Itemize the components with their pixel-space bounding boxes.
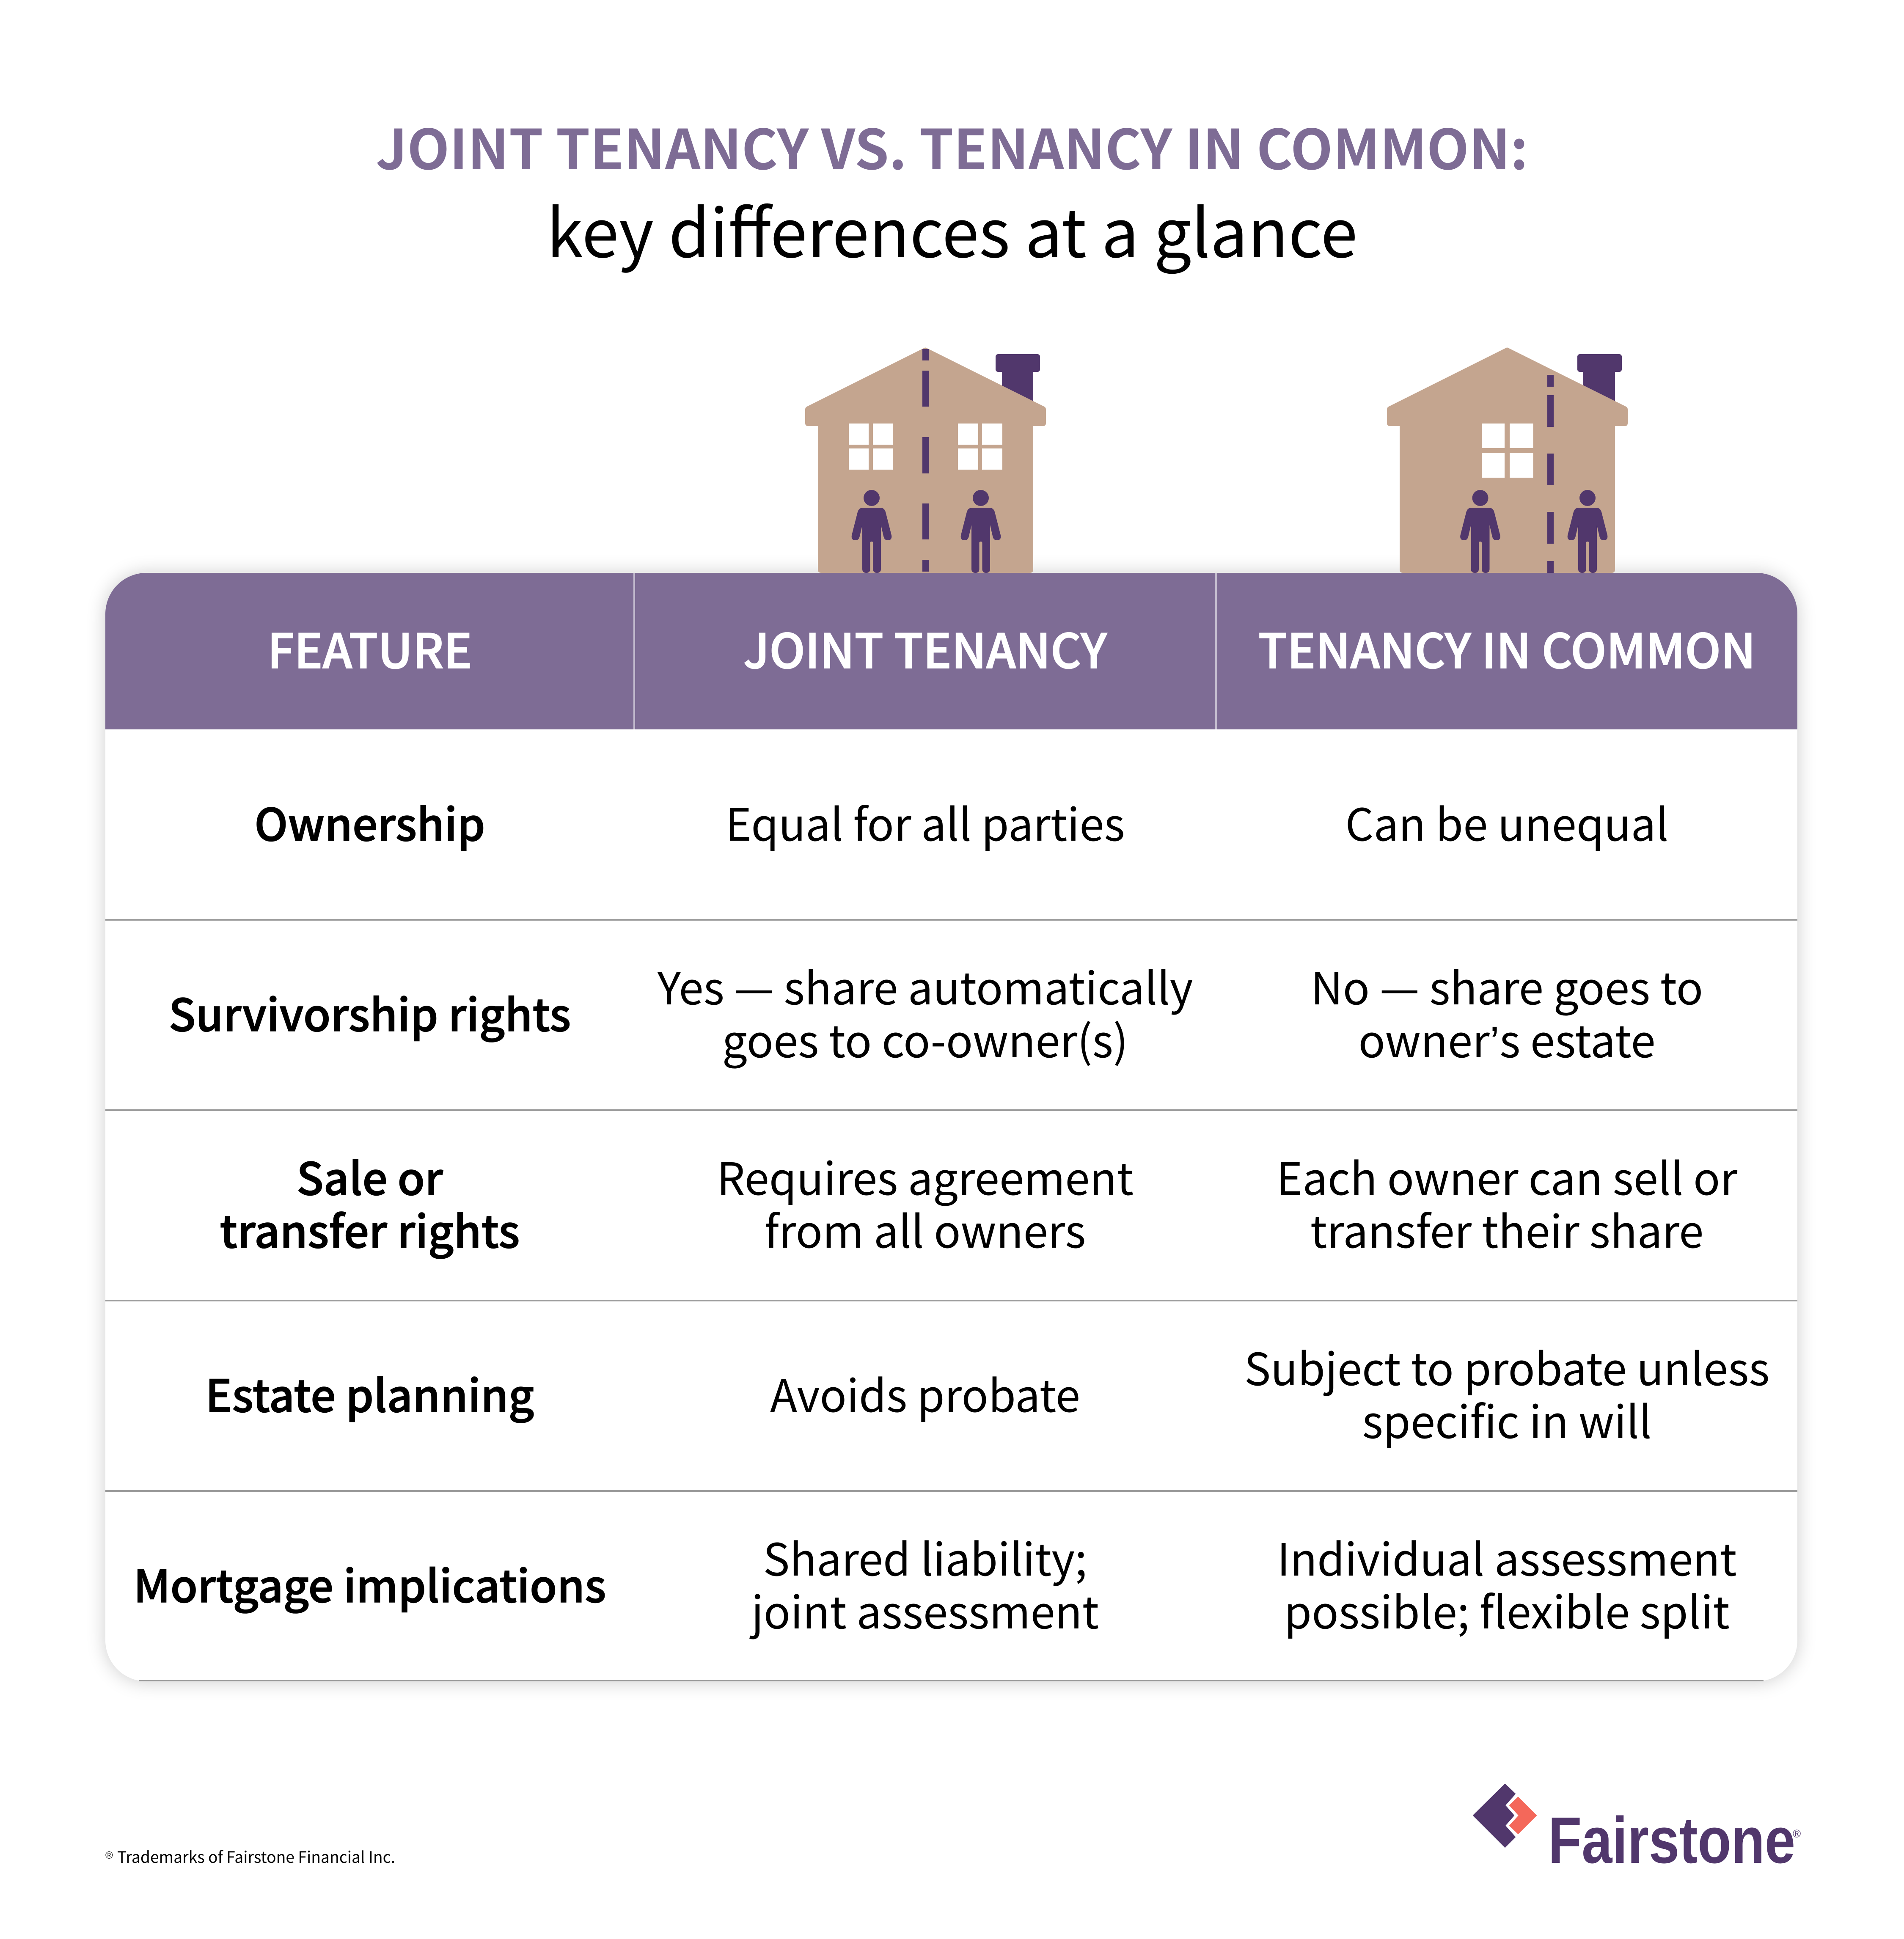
tenancy in common value: specific in will [1362,1387,1652,1451]
logo mark purple [1473,1784,1515,1847]
joint tenancy value [634,1488,1216,1678]
wordmark: Fairstone [1548,1804,1795,1877]
feature label: transfer rights [220,1196,520,1261]
tenancy in common value: Subject to probate unless [1244,1334,1769,1398]
tenancy in common value: Can be unequal [1345,789,1668,854]
subtitle: key differences at a glance [547,181,1357,277]
joint tenancy value: Shared liability; [763,1524,1087,1589]
tenancy in common value [1216,1298,1798,1488]
person right [961,490,1001,573]
tenancy in common value: No — share goes to [1311,953,1703,1018]
logo mark coral [1510,1797,1536,1834]
chimney [996,354,1040,406]
panel: comparison table [105,573,1797,1681]
tenancy in common value [1216,917,1798,1107]
dashed equal-share divider [922,349,929,572]
table header band [105,573,1797,729]
joint tenancy value: Yes — share automatically [658,953,1193,1018]
house body [1387,348,1628,573]
logo: Fairstone [1473,1784,1801,1877]
tenancy in common value [1216,1488,1798,1678]
row: survivorship rights [105,920,1797,1110]
feature label: Mortgage implications [133,1551,606,1615]
header: joint tenancy: JOINT TENANCY [743,613,1107,682]
joint tenancy value: from all owners [765,1196,1086,1261]
feature label: Survivorship rights [169,980,571,1044]
title: main heading: JOINT TENANCY VS. TENANCY IN COMMON: [376,106,1528,185]
joint tenancy value: goes to co-owner(s) [722,1006,1128,1070]
left window [849,424,893,470]
joint tenancy value [634,1107,1216,1298]
registered mark: ® [1793,1827,1801,1840]
icon: joint tenancy house [805,348,1046,573]
tenancy in common value: transfer their share [1310,1196,1703,1261]
joint tenancy value: joint assessment [751,1577,1099,1642]
joint tenancy value: Avoids probate [770,1361,1080,1425]
window [1482,424,1533,478]
tenancy in common value: Individual assessment [1277,1524,1737,1589]
joint tenancy value [634,917,1216,1107]
tenancy in common value [1216,1107,1798,1298]
feature label: Ownership [254,789,485,854]
chimney [1577,354,1622,406]
row: mortgage implications [105,1491,1797,1681]
joint tenancy value: Equal for all parties [725,789,1125,854]
tenancy in common value: Each owner can sell or [1277,1144,1737,1208]
house body [805,348,1046,573]
footnote: trademark: ® [105,1850,113,1861]
dashed unequal-share divider [1547,375,1554,573]
person left [852,490,891,573]
right window [958,424,1002,470]
header: tenancy in common: TENANCY IN COMMON [1258,613,1755,682]
header: feature: FEATURE [267,613,472,682]
person left [1460,490,1500,573]
row: ownership [105,729,1797,920]
tenancy in common value: possible; flexible split [1284,1577,1730,1642]
footnote: trademark: Trademarks of Fairstone Financial Inc. [117,1845,395,1867]
feature label: Sale or [297,1144,443,1208]
feature label: Estate planning [206,1361,534,1425]
row: sale or transfer rights [105,1110,1797,1301]
feature label [105,1107,634,1298]
row: estate planning [105,1301,1797,1491]
tenancy in common value: owner’s estate [1358,1006,1656,1070]
joint tenancy value: Requires agreement [717,1144,1134,1208]
icon: tenancy in common house [1387,348,1628,573]
person right [1568,490,1607,573]
